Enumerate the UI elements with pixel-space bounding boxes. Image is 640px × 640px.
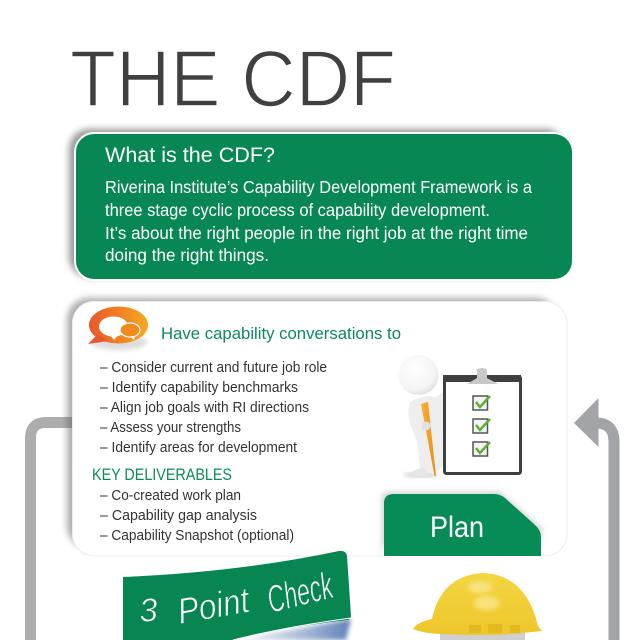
- text block: conversation list: – Assess your strengths: [100, 420, 241, 436]
- arrow: left cycle line: [30, 422, 75, 640]
- text block: CDF description: doing the right things.: [105, 245, 269, 265]
- text block: deliverables list: [100, 488, 294, 544]
- panel: what is the CDF: [69, 129, 574, 281]
- label: Point: Point: [174, 579, 254, 632]
- label: 3: 3: [138, 591, 159, 629]
- icon: check 1: [473, 396, 490, 410]
- text block: conversation list: – Identify areas for development: [100, 440, 297, 456]
- text block: CDF description: [105, 177, 532, 265]
- text block: conversation list: [100, 360, 327, 456]
- text block: conversation list: – Align job goals with RI directions: [100, 400, 309, 416]
- title: THE CDF: [70, 34, 396, 123]
- text block: CDF description: three stage cyclic process of capability development.: [105, 200, 490, 220]
- tab: plan: [381, 491, 543, 556]
- icon: check 3: [473, 442, 490, 456]
- heading: have capability conversations: Have capability conversations to: [161, 324, 401, 343]
- icon: clipboard with checks: [443, 368, 521, 474]
- banner: 3 point check: [123, 551, 351, 640]
- tab: plan: Plan: [430, 511, 484, 544]
- arrow: right cycle line with head: [574, 398, 614, 640]
- heading: key deliverables: KEY DELIVERABLES: [92, 466, 232, 484]
- text block: deliverables list: – Co-created work plan: [100, 488, 241, 504]
- label: Check: Check: [263, 565, 338, 622]
- text block: CDF description: It’s about the right people in the right job at the right time: [105, 223, 528, 243]
- text block: deliverables list: – Capability Snapshot (optional): [100, 528, 294, 544]
- icon: speech bubbles: [88, 306, 148, 350]
- text block: deliverables list: – Capability gap analysis: [100, 508, 257, 524]
- text block: conversation list: – Identify capability benchmarks: [100, 380, 298, 396]
- icon: figure with pencil: [398, 355, 445, 478]
- heading: what is the CDF: What is the CDF?: [105, 144, 275, 167]
- icon: check 2: [473, 419, 490, 433]
- text block: conversation list: – Consider current and future job role: [100, 360, 327, 376]
- text block: CDF description: Riverina Institute’s Capability Development Framework is a: [105, 177, 532, 197]
- panel: plan stage: [67, 298, 567, 556]
- icon: hard hat: [413, 573, 542, 640]
